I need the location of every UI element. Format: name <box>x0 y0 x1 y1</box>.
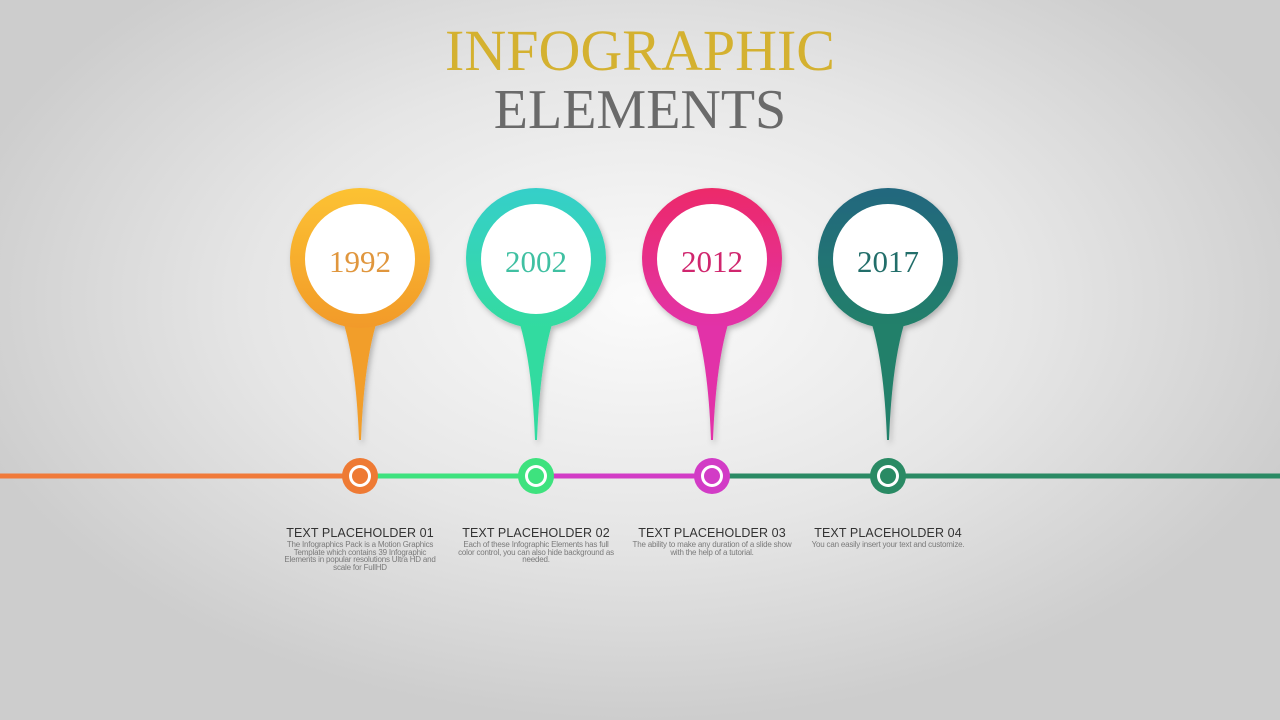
timeline nodes <box>342 458 906 494</box>
caption 02 <box>458 526 614 564</box>
pin 1992: 1992 <box>329 244 391 279</box>
caption 04: TEXT PLACEHOLDER 04 <box>814 526 962 540</box>
caption 04: You can easily insert your text and customize. <box>812 540 964 549</box>
pin 2017: 2017 <box>857 244 919 279</box>
caption 03: The ability to make any duration of a slide show with the help of a tutorial. <box>633 540 791 556</box>
pin 2012 <box>642 188 782 440</box>
pin 2017 <box>818 188 958 440</box>
pin 2012: 2012 <box>681 244 743 279</box>
caption 01: TEXT PLACEHOLDER 01 <box>286 526 434 540</box>
title line 1: INFOGRAPHIC <box>445 18 835 83</box>
caption 03: TEXT PLACEHOLDER 03 <box>638 526 786 540</box>
caption 01: The Infographics Pack is a Motion Graphics Template which contains 39 Infographic Elements in popular resolutions Ultra HD and scale for FullHD <box>284 540 436 572</box>
pin 2002: 2002 <box>505 244 567 279</box>
caption 02: Each of these Infographic Elements has full color control, you can also hide background as needed. <box>458 540 614 564</box>
caption 03 <box>632 526 792 556</box>
caption 01 <box>284 526 436 572</box>
caption 02: TEXT PLACEHOLDER 02 <box>462 526 610 540</box>
pin 2002 <box>466 188 606 440</box>
pin 1992 <box>290 188 430 440</box>
caption 04 <box>812 526 964 549</box>
subtitle: ELEMENTS <box>494 79 786 141</box>
timeline line segments <box>0 474 1280 478</box>
